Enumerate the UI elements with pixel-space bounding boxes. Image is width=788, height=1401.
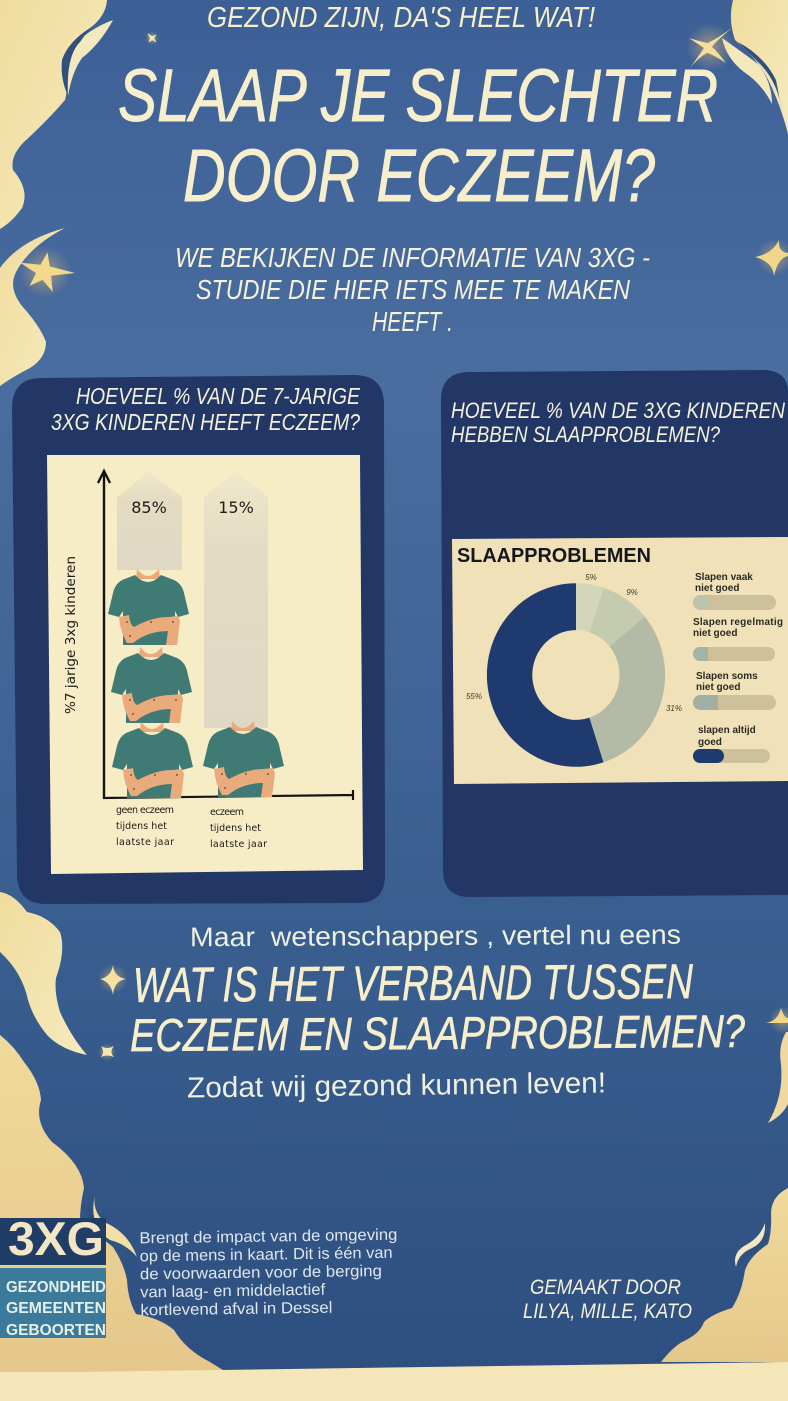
icon: child 4	[203, 721, 284, 797]
donut labels: 5%	[585, 573, 597, 582]
legend: slapen altijd goed: goed	[698, 737, 722, 748]
question intro: Maar wetenschappers , vertel nu eens	[190, 920, 681, 952]
description text: op de mens in kaart. Dit is één van	[140, 1245, 393, 1265]
panel heading: eczeem: HOEVEEL % VAN DE 7-JARIGE	[76, 383, 361, 409]
y axis	[98, 471, 110, 799]
cloud: top left	[0, 0, 113, 229]
cloud: top right	[722, 0, 788, 134]
legend: slapen vaak niet goed: Slapen vaak	[695, 572, 753, 583]
legend: slapen regelmatig niet goed: Slapen regelmatig	[693, 617, 783, 628]
label: 85%: 85%	[131, 498, 167, 517]
top tagline: GEZOND ZIJN, DA'S HEEL WAT!	[207, 2, 595, 34]
column: 15% background	[204, 472, 268, 728]
donut labels	[466, 573, 682, 713]
icon: star right	[755, 239, 788, 276]
cloud: lower right	[661, 1188, 788, 1362]
intro text: STUDIE DIE HIER IETS MEE TE MAKEN	[196, 274, 631, 305]
donut chart	[487, 583, 665, 767]
x label: eczeem	[210, 807, 267, 850]
intro text: WE BEKIJKEN DE INFORMATIE VAN 3XG -	[175, 242, 650, 273]
icon: child 2	[111, 647, 192, 723]
logo: 3XG: 3XG	[8, 1212, 104, 1265]
icon: star right edge	[766, 1006, 788, 1034]
y axis label: %7 jarige 3xg kinderen	[64, 556, 79, 714]
logo: 3XG: GEZONDHEID	[6, 1279, 106, 1296]
logo: 3XG	[0, 1212, 106, 1339]
legend: slapen regelmatig niet goed	[693, 617, 783, 661]
donut labels: 9%	[626, 588, 638, 597]
label: 15%: 15%	[218, 498, 254, 517]
panel heading: eczeem: 3XG KINDEREN HEEFT ECZEEM?	[51, 409, 360, 435]
x axis	[103, 790, 353, 800]
legend: slapen altijd goed: slapen altijd	[698, 725, 756, 736]
chart title: SLAAPPROBLEMEN	[457, 544, 651, 567]
cloud: mid left crescent	[0, 892, 87, 1055]
legend: slapen soms niet goed: Slapen soms	[696, 671, 758, 682]
icon: star top right	[686, 23, 734, 71]
x label: eczeem: eczeem	[210, 807, 244, 818]
logo: 3XG: GEMEENTEN	[6, 1300, 106, 1317]
x label: geen eczeem	[116, 805, 174, 848]
cloud: right crescent	[768, 1032, 788, 1123]
panel: slaapproblemen	[441, 370, 788, 897]
cloud: left moon	[0, 228, 65, 386]
x label: geen eczeem: tijdens het	[116, 821, 167, 832]
legend: slapen vaak niet goed: niet goed	[695, 583, 739, 594]
x label: geen eczeem: geen eczeem	[116, 805, 174, 816]
panel heading: slaapproblemen	[451, 398, 785, 447]
legend: slapen soms niet goed: niet goed	[696, 682, 740, 693]
title: DOOR ECZEEM?	[183, 134, 655, 217]
question closing: Zodat wij gezond kunnen leven!	[187, 1067, 606, 1105]
bottom cream band	[0, 1362, 788, 1401]
chart card: eczeem	[47, 455, 363, 874]
credits: GEMAAKT DOOR	[530, 1276, 681, 1299]
legend: slapen soms niet goed	[693, 671, 776, 710]
donut labels: 55%	[466, 692, 482, 701]
panel: eczeem	[12, 375, 385, 904]
title	[118, 54, 718, 217]
x label: geen eczeem: laatste jaar	[116, 837, 174, 848]
description text: kortlevend afval in Dessel	[140, 1300, 333, 1319]
icon: star by question	[98, 964, 128, 995]
icon: moon star left	[19, 246, 75, 298]
description text: van laag- en middelactief	[140, 1282, 326, 1301]
icon: child 1	[108, 569, 189, 645]
icon: small star by question	[98, 1043, 116, 1061]
logo: 3XG: GEBOORTEN	[6, 1322, 106, 1339]
icon: child 3	[112, 722, 193, 798]
credits: LILYA, MILLE, KATO	[523, 1300, 692, 1323]
description text: de voorwaarden voor de berging	[140, 1263, 382, 1283]
legend: slapen regelmatig niet goed: niet goed	[693, 628, 737, 639]
cloud: lower left	[0, 1035, 226, 1372]
legend: slapen altijd goed	[693, 725, 770, 763]
icon: star top left	[145, 31, 159, 45]
intro text: HEEFT .	[372, 306, 453, 337]
description text	[139, 1227, 399, 1319]
panel heading: eczeem	[51, 383, 361, 435]
chart card: slaapproblemen	[452, 537, 788, 784]
description text: Brengt de impact van de omgeving	[139, 1227, 398, 1247]
credits	[523, 1276, 692, 1323]
main question	[130, 955, 745, 1061]
x label: eczeem: tijdens het	[210, 823, 261, 834]
column: 85% background	[117, 472, 182, 570]
donut labels: 31%	[666, 704, 682, 713]
panel heading: slaapproblemen: HEBBEN SLAAPPROBLEMEN?	[451, 422, 721, 447]
intro text	[175, 242, 650, 337]
legend: slapen vaak niet goed	[693, 572, 776, 610]
x label: eczeem: laatste jaar	[210, 839, 267, 850]
